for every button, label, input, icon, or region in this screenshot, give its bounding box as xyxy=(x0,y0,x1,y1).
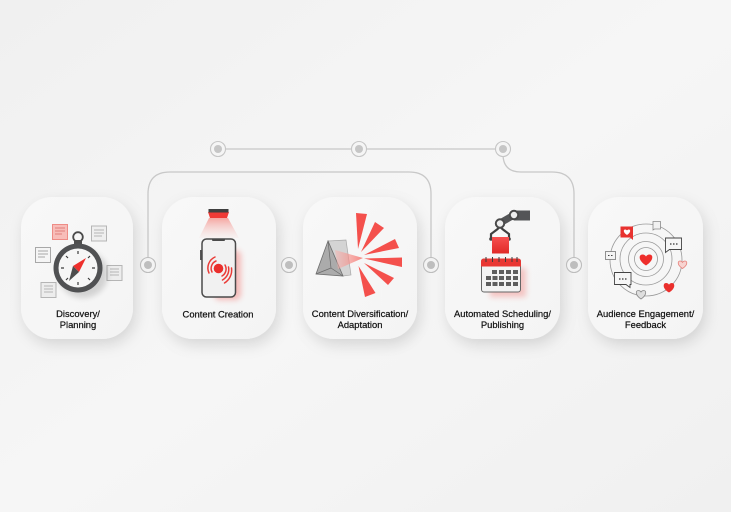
card xyxy=(162,197,276,339)
node: top right xyxy=(496,142,510,156)
icon: notes xyxy=(36,224,122,298)
icon: red heart xyxy=(664,283,674,292)
icon: gray heart xyxy=(636,290,646,299)
label: Content Creation xyxy=(183,308,253,320)
icon: center heart xyxy=(640,254,652,266)
connector lines xyxy=(148,149,574,265)
icon: small square bubble xyxy=(653,222,660,230)
label: Audience Engagement/ xyxy=(597,308,694,319)
node: between cards 4 and 5 xyxy=(566,258,582,272)
panel: Automated Scheduling/Publishing xyxy=(445,197,560,339)
icon: robot arm xyxy=(489,210,530,254)
panel: Content Creation xyxy=(162,197,276,339)
panel: Audience Engagement/Feedback xyxy=(588,197,703,339)
label: Discovery/ xyxy=(56,308,100,319)
label: Publishing xyxy=(481,319,524,330)
label: Planning xyxy=(60,319,96,330)
icon: phone with signal xyxy=(200,238,241,300)
card xyxy=(21,197,133,339)
panel: Content Diversification/Adaptation xyxy=(303,197,417,339)
label: Automated Scheduling/ xyxy=(454,308,551,319)
icon: compass xyxy=(54,232,108,298)
node: between cards 3 and 4 xyxy=(424,258,438,272)
label: Adaptation xyxy=(338,319,382,330)
node: top left xyxy=(210,142,226,156)
icon: concentric rings xyxy=(610,224,682,296)
icon: chat bubble left xyxy=(614,272,631,288)
icon: chat bubble right xyxy=(666,238,682,252)
icon: lamp with beam xyxy=(199,209,239,238)
card xyxy=(588,197,703,339)
icon: outline heart xyxy=(678,261,687,268)
icon: small chat box xyxy=(606,252,616,260)
node: between cards 1 and 2 xyxy=(140,258,156,272)
card xyxy=(303,197,417,339)
card xyxy=(445,197,560,339)
label: Feedback xyxy=(625,319,666,330)
icon: red heart bubble xyxy=(620,226,633,240)
icon: calendar xyxy=(481,257,526,297)
panel: Discovery/Planning xyxy=(21,197,133,339)
icon: rays xyxy=(356,213,402,297)
label: Content Diversification/ xyxy=(312,308,408,319)
node: top middle xyxy=(352,142,366,156)
icon: prism xyxy=(316,240,363,276)
node: between cards 2 and 3 xyxy=(282,258,296,272)
